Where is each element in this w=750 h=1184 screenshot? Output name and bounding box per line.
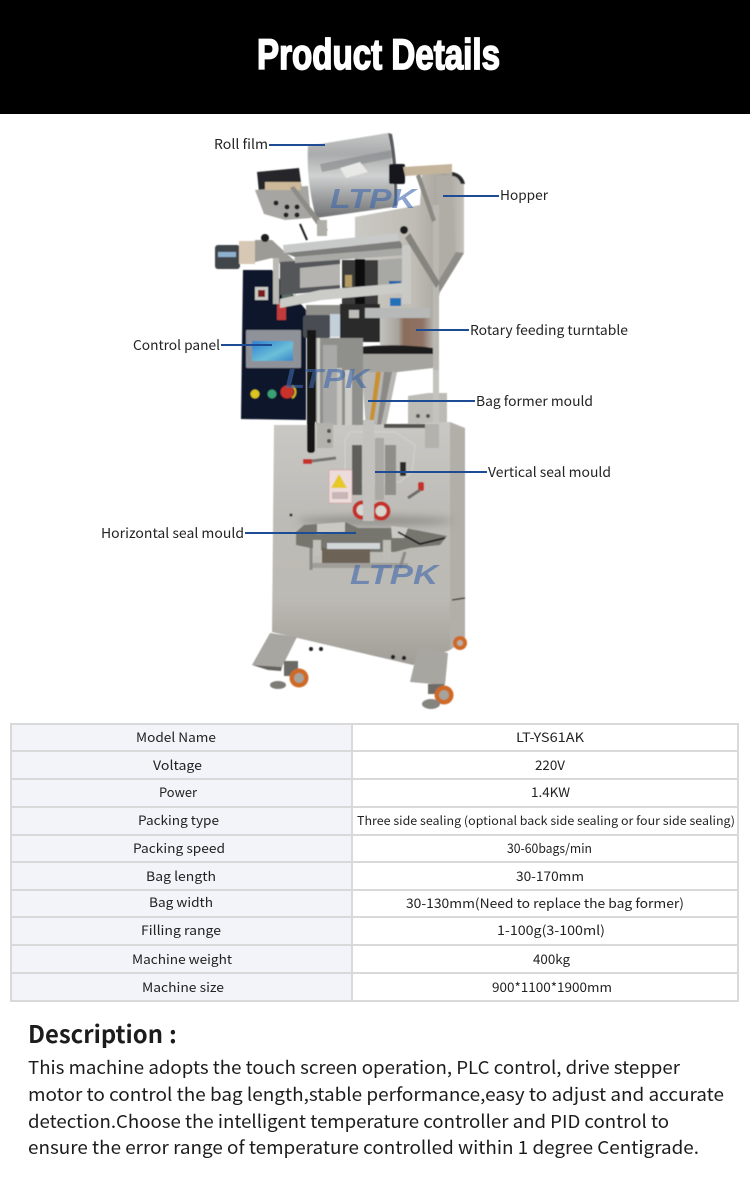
- row: Machine weight: Machine weight: [132, 949, 232, 968]
- row: Model Name: [136, 727, 585, 746]
- geared motor on the left: [215, 234, 298, 272]
- row: Model Name: Model Name: [136, 727, 216, 746]
- description heading: :: [169, 1015, 177, 1050]
- control box: [255, 168, 328, 240]
- geared motor and feeding turntable: [303, 304, 433, 378]
- row: Bag width: 30-130mm(Need to replace the bag former): [406, 893, 684, 912]
- row: Machine weight: [132, 949, 571, 968]
- row: Machine size: [142, 977, 612, 996]
- callout: Horizontal seal mould: Horizontal seal mould: [101, 522, 244, 542]
- foot plates and castor wheels: [252, 514, 467, 709]
- description body: This machine adopts the touch screen operation, PLC control, drive stepper: [28, 1054, 681, 1080]
- row: Bag length: 30-170mm: [516, 866, 584, 885]
- vertical seal mould: [329, 420, 415, 521]
- description body: ensure the error range of temperature controlled within 1 degree Centigrade.: [28, 1134, 699, 1160]
- row: Filling range: 1-100g(3-100ml): [497, 920, 605, 939]
- row: Voltage: 220V: [535, 755, 566, 774]
- black control panel: [241, 270, 306, 420]
- hopper: [355, 172, 465, 330]
- callout: Control panel: Control panel: [133, 334, 220, 354]
- row: Voltage: Voltage: [153, 755, 202, 774]
- specification table: [11, 724, 738, 1001]
- description body: detection.Choose the intelligent temperature controller and PID control to: [28, 1108, 669, 1134]
- row: Packing type: Packing type: [138, 810, 219, 829]
- LTPK watermark top: LTPK: [330, 183, 418, 214]
- description body: [28, 1054, 724, 1160]
- handles and top brackets: [303, 420, 439, 498]
- row: Bag width: [149, 892, 684, 912]
- row: Packing type: [138, 810, 735, 829]
- row: Packing speed: 30-60bags/min: [507, 838, 592, 857]
- row: Bag width: Bag width: [149, 892, 213, 911]
- row: Machine size: 900*1100*1900mm: [492, 977, 612, 996]
- row: Packing speed: [133, 838, 592, 857]
- row: Bag length: Bag length: [146, 866, 216, 885]
- central column and bag former: [307, 330, 447, 440]
- row: Filling range: [141, 920, 605, 939]
- description heading: Description: [28, 1015, 163, 1050]
- row: Model Name: LT-YS61AK: [516, 727, 585, 746]
- callout: Hopper: [443, 184, 549, 204]
- roll of film: [308, 133, 452, 222]
- upper steel frame: [273, 226, 440, 334]
- description: [28, 1015, 724, 1160]
- vertical rod: [433, 205, 439, 437]
- description body: motor to control the bag length,stable performance,easy to adjust and accurate: [28, 1081, 724, 1107]
- callout: Hopper: Hopper: [500, 184, 549, 204]
- machine photo illustration: [215, 133, 467, 709]
- header banner: [0, 0, 750, 114]
- row: Power: 1.4KW: [531, 782, 571, 801]
- horizontal seal mould: [296, 522, 447, 570]
- row: Voltage: [153, 755, 566, 774]
- row: Bag length: [146, 866, 584, 885]
- callout: Roll film: [214, 133, 325, 153]
- row: Packing speed: Packing speed: [133, 838, 225, 857]
- row: Filling range: Filling range: [141, 920, 221, 939]
- row: Machine weight: 400kg: [533, 949, 571, 968]
- row: Power: Power: [159, 782, 198, 801]
- callout: Rotary feeding turntable: Rotary feeding turntable: [470, 319, 628, 339]
- row: Packing type: Three side sealing (optional back side sealing or four side sealing): [357, 812, 735, 829]
- callout: Roll film: Roll film: [214, 133, 268, 153]
- steel cabinet: [272, 422, 465, 665]
- row: Machine size: Machine size: [142, 977, 224, 996]
- callout: Vertical seal mould: Vertical seal mould: [488, 461, 611, 481]
- callout: Control panel: [133, 334, 272, 354]
- row: Power: [159, 782, 571, 801]
- LTPK watermark bottom: LTPK: [350, 559, 440, 590]
- LTPK watermark middle: LTPK: [285, 363, 371, 394]
- title: Product Details: [257, 31, 500, 79]
- callout: Bag former mould: Bag former mould: [476, 390, 593, 410]
